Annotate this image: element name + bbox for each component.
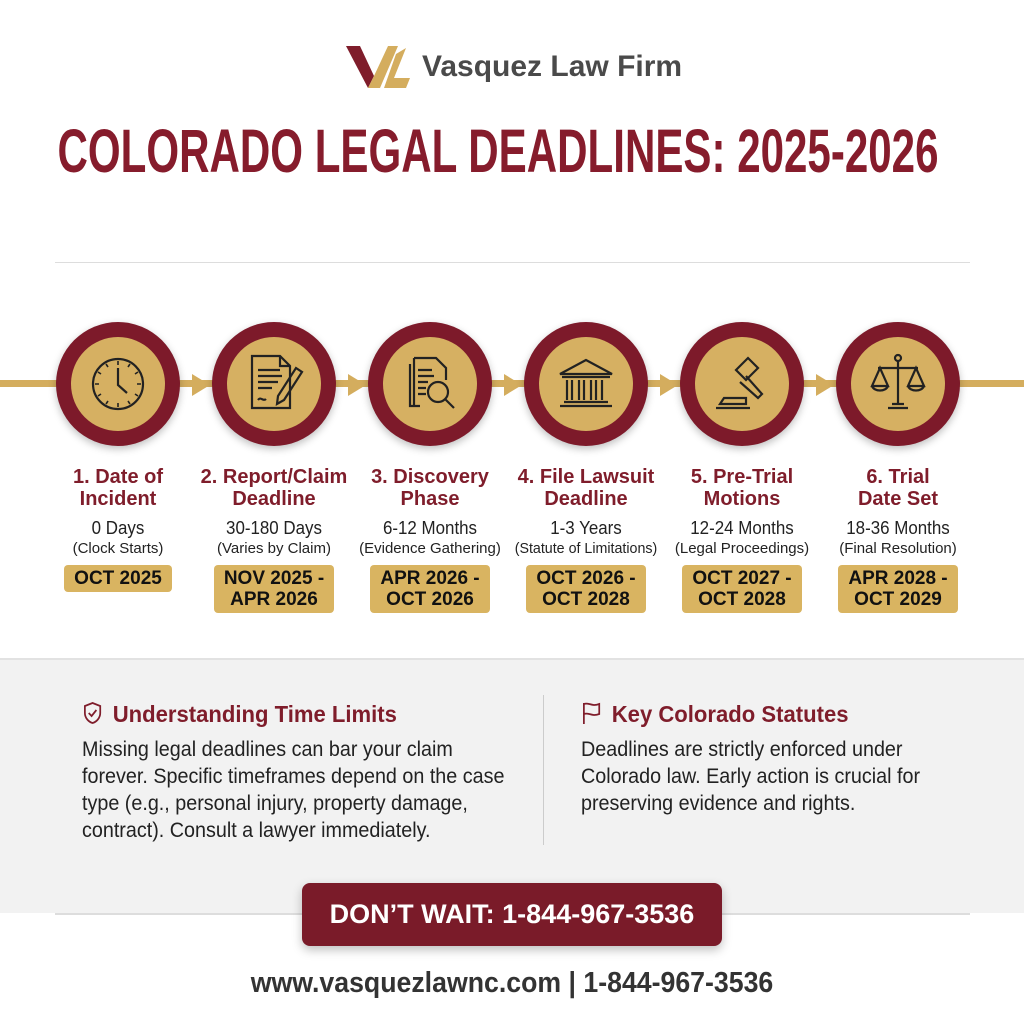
logo: Vasquez Law Firm [422, 50, 682, 83]
arrows [192, 374, 831, 396]
step 2 [201, 466, 347, 613]
step 5: OCT 2027 - [692, 568, 792, 589]
icon: gavel [680, 322, 804, 446]
step 4: OCT 2028 [542, 589, 630, 610]
icon: magnifier doc [368, 322, 492, 446]
panel: understanding time limits: contract). Consult a lawyer immediately. [82, 819, 431, 842]
step 4: 1-3 Years [550, 518, 622, 538]
step 3: (Evidence Gathering) [359, 540, 501, 557]
step 1 [64, 466, 172, 592]
footer: www.vasquezlawnc.com | 1-844-967-3536 [251, 967, 773, 999]
step 4: 4. File Lawsuit [518, 466, 654, 488]
icon: document pen [212, 322, 336, 446]
step 5: (Legal Proceedings) [675, 540, 809, 557]
step 6: OCT 2029 [854, 589, 942, 610]
step 5: Motions [704, 488, 780, 510]
step 5: OCT 2028 [698, 589, 786, 610]
CTA button [302, 883, 722, 946]
panel: understanding time limits: Missing legal deadlines can bar your claim [82, 738, 453, 761]
panel: understanding time limits: type (e.g., personal injury, property damage, [82, 792, 468, 815]
step 5: 5. Pre-Trial [691, 466, 793, 488]
step 2: (Varies by Claim) [217, 540, 331, 557]
step 5: 12-24 Months [690, 518, 794, 538]
panel: understanding time limits [82, 701, 504, 842]
step 2: Deadline [232, 488, 316, 510]
step 4: OCT 2026 - [536, 568, 636, 589]
info panel background [0, 658, 1024, 913]
step 4: (Statute of Limitations) [515, 540, 657, 557]
step 4 [515, 466, 657, 613]
step 3: APR 2026 - [380, 568, 480, 589]
step 3: 3. Discovery [371, 466, 489, 488]
step 2: 2. Report/Claim [201, 466, 347, 488]
panel: key colorado statutes: Key Colorado Statutes [612, 701, 849, 727]
step 1: 1. Date of [73, 466, 163, 488]
step 2: APR 2026 [230, 589, 318, 610]
step 1: OCT 2025 [74, 568, 162, 589]
icon: scales [836, 322, 960, 446]
panel: understanding time limits: forever. Specific timeframes depend on the case [82, 765, 504, 788]
step 1: Incident [80, 488, 156, 510]
step 6: Date Set [858, 488, 938, 510]
panel: key colorado statutes: preserving evidence and rights. [581, 792, 855, 815]
timeline [0, 380, 1024, 387]
step 1: 0 Days [92, 518, 144, 538]
logo [346, 46, 682, 88]
step 2: NOV 2025 - [224, 568, 324, 589]
step 6 [838, 466, 958, 613]
icon: clock [56, 322, 180, 446]
step 5 [675, 466, 809, 613]
step 4: Deadline [544, 488, 628, 510]
step 2: 30-180 Days [226, 518, 322, 538]
panel: key colorado statutes [581, 701, 920, 815]
step 3: 6-12 Months [383, 518, 477, 538]
CTA button: DON’T WAIT: 1-844-967-3536 [330, 899, 694, 929]
step 6: 18-36 Months [846, 518, 950, 538]
icon: courthouse [524, 322, 648, 446]
step 6: APR 2028 - [848, 568, 948, 589]
panel: key colorado statutes: Deadlines are strictly enforced under [581, 738, 902, 761]
step 3 [359, 466, 501, 613]
step 6: (Final Resolution) [839, 540, 957, 557]
panel: key colorado statutes: Colorado law. Early action is crucial for [581, 765, 920, 788]
step 3: OCT 2026 [386, 589, 474, 610]
title: COLORADO LEGAL DEADLINES: 2025-2026 [58, 117, 938, 185]
step 6: 6. Trial [866, 466, 930, 488]
panel: understanding time limits: Understanding Time Limits [113, 701, 397, 727]
step 1: (Clock Starts) [73, 540, 163, 557]
step 3: Phase [401, 488, 459, 510]
